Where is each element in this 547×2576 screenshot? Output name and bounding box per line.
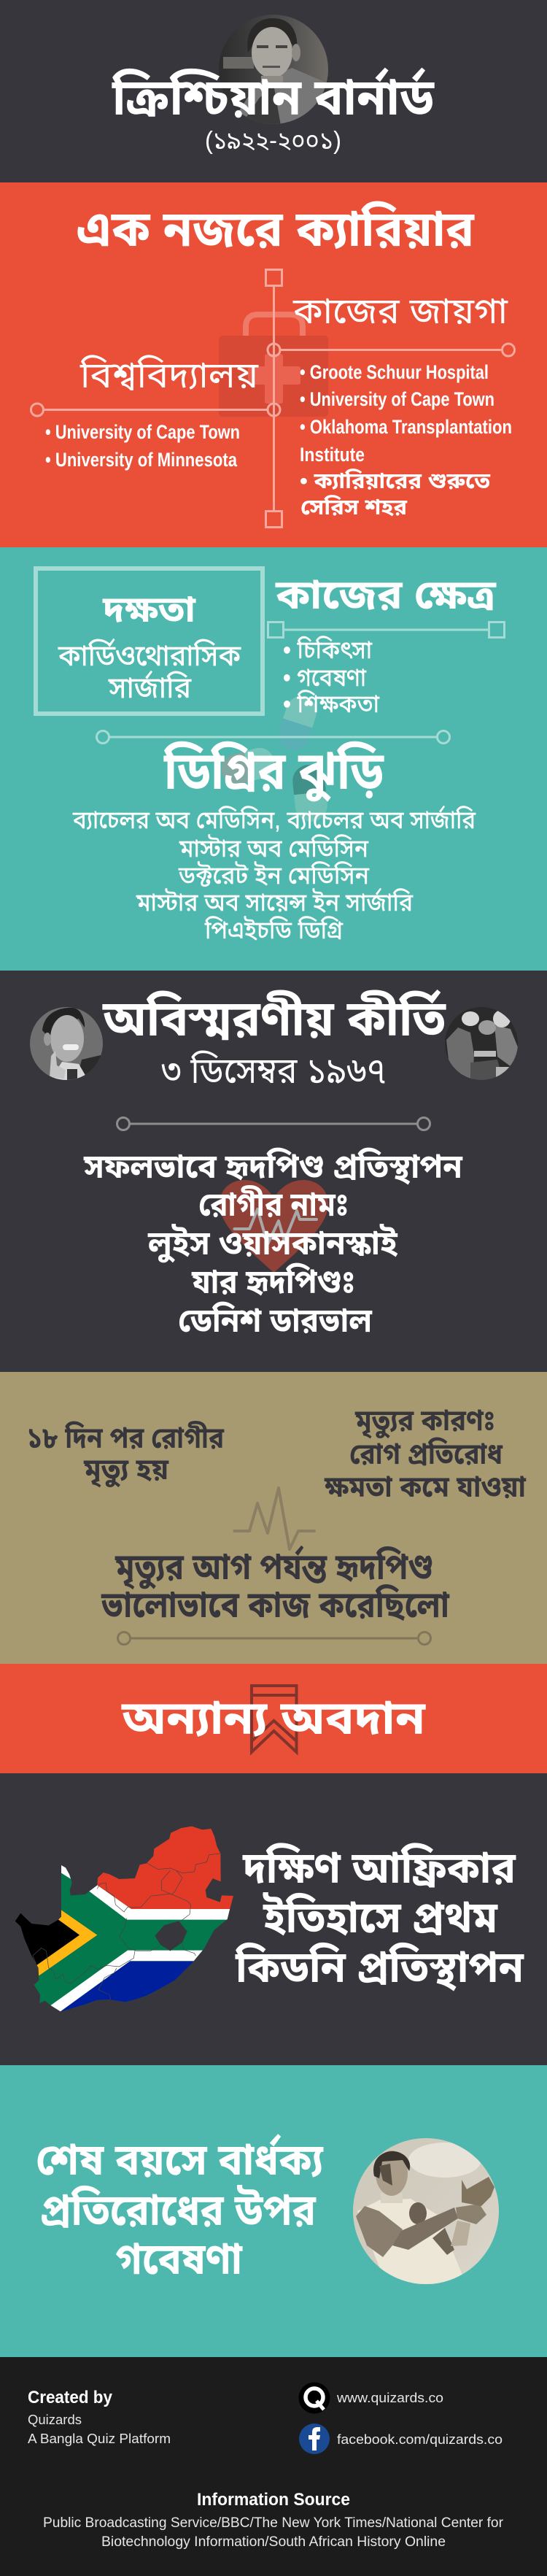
icon: medical bag — [219, 315, 328, 417]
text: research: শেষ বয়সে বার্ধক্য — [36, 2133, 324, 2184]
list: workplaces — [300, 361, 512, 520]
list: workplaces: সেরিস শহর — [300, 494, 408, 520]
portrait: patient doctor smiling — [29, 1007, 104, 1082]
information sources: Biotechnology Information/South African History Online — [101, 2534, 446, 2550]
panel: kidney transplant — [15, 1826, 524, 2011]
list: degrees: পিএইচডি ডিগ্রি — [204, 916, 343, 944]
facebook address: facebook.com/quizards.co — [337, 2432, 503, 2447]
text: transplant details — [83, 1147, 463, 1339]
list: fields: • চিকিৎসা — [283, 636, 373, 664]
text: first kidney transplant: দক্ষিণ আফ্রিকার — [242, 1843, 516, 1892]
list: degrees: মাস্টার অব মেডিসিন — [179, 834, 368, 863]
credit: Created by — [28, 2388, 113, 2407]
information source heading: Information Source — [197, 2490, 350, 2510]
list: degrees: ব্যাচেলর অব মেডিসিন, ব্যাচেলর অব সার্জারি — [72, 806, 476, 834]
text: cause of death — [324, 1405, 527, 1503]
text: research: প্রতিরোধের উপর — [40, 2185, 317, 2234]
list: workplaces: • ক্যারিয়ারের শুরুতে — [300, 468, 491, 493]
list: universities — [45, 421, 240, 471]
list: workplaces: Institute — [300, 444, 365, 466]
timeline connector — [31, 270, 515, 527]
text: cause of death: ক্ষমতা কমে যাওয়া — [324, 1471, 527, 1503]
heading: degrees: ডিগ্রির ঝুড়ি — [163, 741, 384, 802]
list: workplaces: • Groote Schuur Hospital — [300, 361, 489, 383]
text: research: গবেষণা — [115, 2234, 243, 2283]
skill heading: দক্ষতা — [102, 589, 196, 630]
date: ৩ ডিসেম্বর ১৯৬৭ — [161, 1050, 387, 1091]
skill box — [36, 568, 263, 714]
portrait: Christiaan Barnard — [219, 15, 330, 126]
icon: Quizards logo — [299, 2382, 330, 2414]
panel: header — [112, 15, 435, 154]
credit: Quizards — [28, 2413, 82, 2427]
credit — [28, 2388, 171, 2446]
list: workplaces: • University of Cape Town — [300, 388, 494, 410]
heading: other contributions: অন্যান্য অবদান — [121, 1692, 426, 1744]
text: cause of death: রোগ প্রতিরোধ — [349, 1438, 503, 1470]
panel: other contributions banner — [0, 1664, 547, 1773]
list: universities: • University of Minnesota — [45, 449, 238, 471]
information sources — [43, 2515, 504, 2550]
website: www.quizards.co — [336, 2391, 443, 2405]
skill box: সার্জারি — [108, 671, 192, 704]
text: research — [36, 2133, 324, 2283]
list: degrees — [72, 806, 476, 944]
heading: career: এক নজরে ক্যারিয়ার — [77, 201, 475, 257]
heading: workplaces: কাজের জায়গা — [292, 290, 508, 331]
decoration: capsules — [218, 692, 329, 823]
panel: footer — [0, 2357, 547, 2576]
map: South Africa flag — [15, 1826, 233, 2011]
heading: memorable achievement: অবিস্মরণীয় কীর্তি — [102, 989, 446, 1046]
icon: pulse line — [235, 1488, 314, 1549]
icon: heart — [220, 1180, 328, 1273]
text: cause of death: মৃত্যুর কারণঃ — [354, 1405, 495, 1439]
text: transplant details: সফলভাবে হৃদপিণ্ড প্রতিস্থাপন — [83, 1147, 463, 1185]
list: fields: • গবেষণা — [283, 664, 367, 692]
credit: A Bangla Quiz Platform — [28, 2432, 171, 2446]
text: transplant details: ডেনিশ ডারভাল — [178, 1301, 373, 1339]
connector: degrees — [96, 731, 449, 743]
text: death after 18 days: মৃত্যু হয় — [83, 1454, 169, 1488]
connector — [117, 1118, 430, 1130]
text: first kidney transplant: ইতিহাসে প্রথম — [263, 1892, 498, 1942]
text: transplant details: যার হৃদপিণ্ডঃ — [191, 1262, 355, 1300]
connector: fields — [268, 622, 505, 638]
heading: universities: বিশ্ববিদ্যালয় — [79, 355, 259, 396]
information sources: Public Broadcasting Service/BBC/The New York Times/National Center for — [43, 2515, 504, 2531]
list: degrees: মাস্টার অব সায়েন্স ইন সার্জারি — [136, 888, 414, 917]
panel: memorable achievement — [30, 990, 518, 1334]
icon: bookmark — [252, 1686, 296, 1752]
list: fields: • শিক্ষকতা — [283, 690, 380, 718]
portrait: Barnard illustration — [353, 2138, 499, 2286]
text: heart worked well: মৃত্যুর আগ পর্যন্ত হৃদপিণ্ড — [115, 1545, 433, 1590]
portrait: surgeons operating — [445, 1007, 519, 1081]
text: death after 18 days — [27, 1422, 225, 1488]
text: transplant details: রোগীর নামঃ — [198, 1185, 349, 1223]
subtitle: life span: (১৯২২-২০০১) — [205, 127, 341, 155]
text: first kidney transplant: কিডনি প্রতিস্থাপন — [235, 1943, 524, 1991]
text: heart worked well — [101, 1545, 450, 1625]
panel: skills, fields and degrees — [0, 547, 547, 971]
title: ক্রিশ্চিয়ান বার্নার্ড — [112, 67, 435, 126]
connector — [118, 1632, 430, 1645]
icon: Facebook — [299, 2423, 330, 2454]
skill text: কার্ডিওথোরাসিক — [58, 639, 241, 672]
panel: aftermath — [0, 1372, 547, 1664]
panel: anti-ageing research — [0, 2065, 547, 2357]
text: death after 18 days: ১৮ দিন পর রোগীর — [27, 1422, 225, 1454]
text: transplant details: লুইস ওয়াসকানস্কাই — [147, 1224, 398, 1263]
heading: fields of work: কাজের ক্ষেত্র — [275, 571, 497, 617]
list: degrees: ডক্টরেট ইন মেডিসিন — [178, 861, 370, 890]
text: first kidney transplant — [235, 1843, 524, 1991]
panel: career at a glance — [0, 182, 547, 547]
text: heart worked well: ভালোভাবে কাজ করেছিলো — [101, 1584, 450, 1625]
list: universities: • University of Cape Town — [45, 421, 240, 443]
list: fields — [283, 636, 380, 718]
